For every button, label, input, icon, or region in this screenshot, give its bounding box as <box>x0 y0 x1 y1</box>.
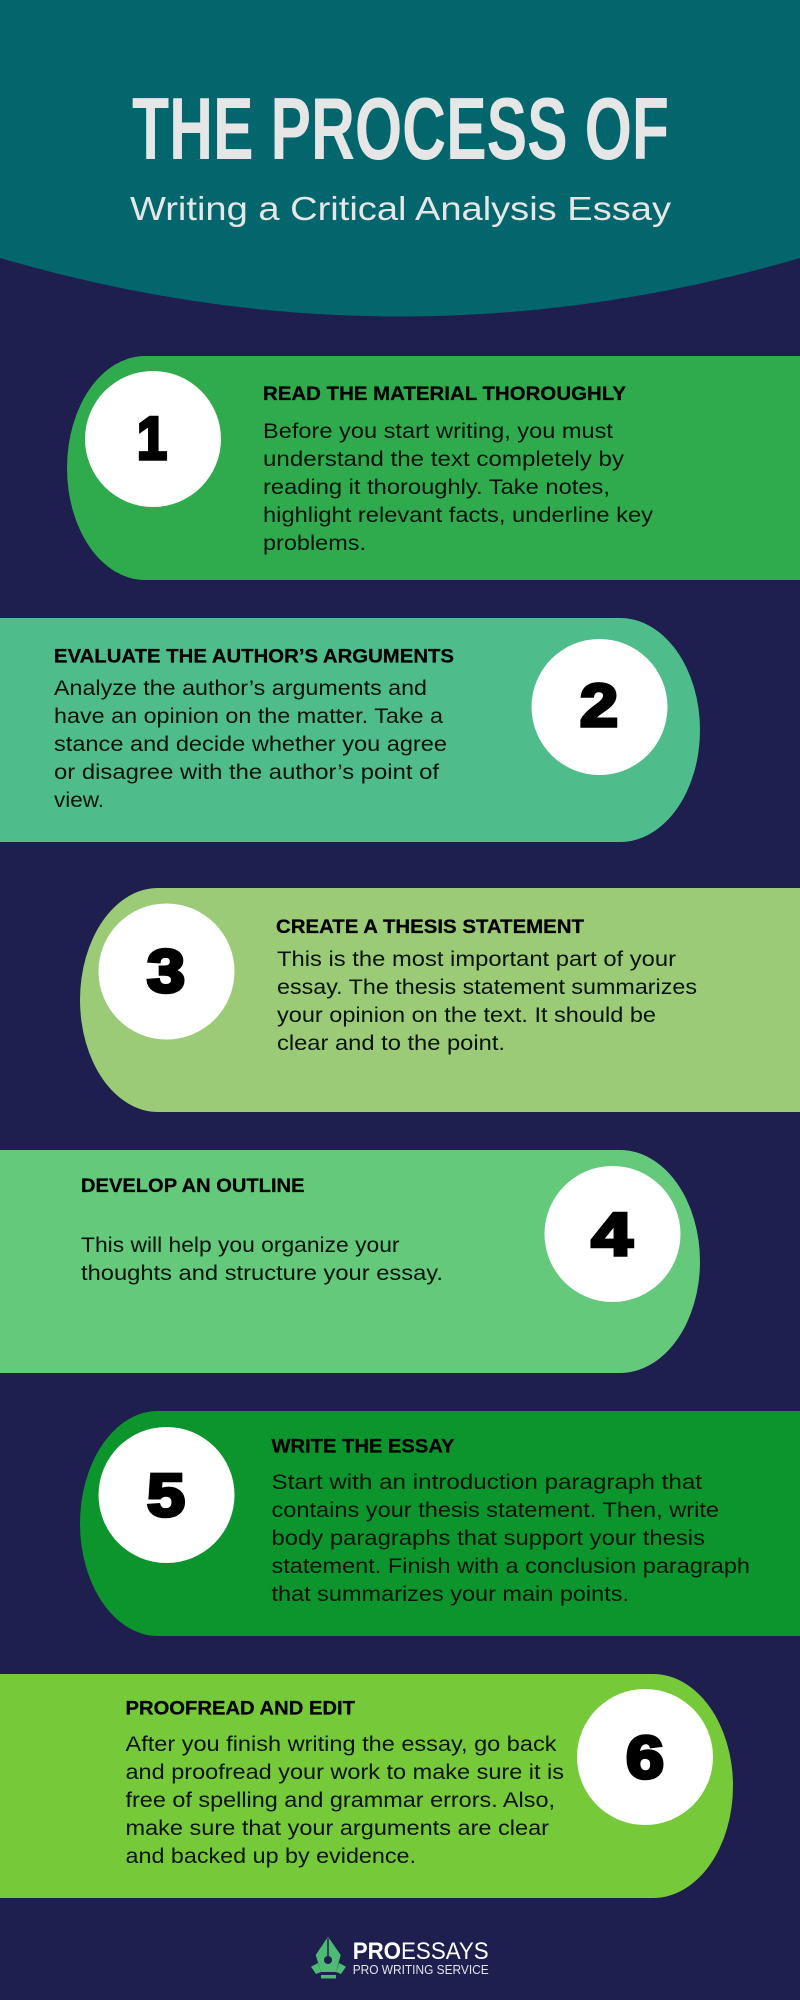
text: step 3 body: This is the most important part of your <box>277 948 676 971</box>
text: step 1 body: problems. <box>263 532 366 555</box>
logo: ProEssays <box>311 1937 489 1978</box>
text: step 1 body: understand the text completely by <box>263 448 625 471</box>
text: step 4 body <box>81 1234 443 1285</box>
panel: step 4 develop outline <box>0 1150 700 1373</box>
text: step 3 body: your opinion on the text. It should be <box>277 1004 656 1027</box>
panel: step 6 proofread and edit <box>0 1674 733 1898</box>
icon: pen nib <box>311 1937 346 1978</box>
panel: step 1 read the material <box>67 356 800 580</box>
number 5: 5 <box>147 1462 185 1529</box>
text: step 6 body: and backed up by evidence. <box>126 1845 416 1868</box>
header banner <box>0 0 800 316</box>
text: step 3 body: clear and to the point. <box>277 1032 505 1055</box>
heading: step 3: CREATE A THESIS STATEMENT <box>276 916 584 938</box>
text: step 4 body: This will help you organize your <box>81 1234 400 1257</box>
text: step 2 body: or disagree with the author’s point of <box>54 761 439 784</box>
number 6: 6 <box>626 1724 664 1791</box>
text: step 5 body: statement. Finish with a conclusion paragraph <box>272 1555 750 1578</box>
text: step 6 body: make sure that your arguments are clear <box>126 1817 549 1840</box>
text: step 2 body: have an opinion on the matter. Take a <box>54 705 443 728</box>
text: step 1 body: reading it thoroughly. Take notes, <box>263 476 610 499</box>
text: step 5 body: contains your thesis statement. Then, write <box>272 1499 719 1522</box>
text: step 6 body <box>126 1733 564 1868</box>
heading: step 6: PROOFREAD AND EDIT <box>126 1698 355 1720</box>
text: step 6 body: and proofread your work to make sure it is <box>126 1761 564 1784</box>
text: step 1 body <box>263 420 654 555</box>
text: step 6 body: After you finish writing the essay, go back <box>126 1733 557 1756</box>
text: step 5 body <box>272 1471 750 1606</box>
text: step 1 body: Before you start writing, you must <box>263 420 613 443</box>
title <box>130 79 672 227</box>
title: Writing a Critical Analysis Essay <box>130 190 672 227</box>
heading: step 5: WRITE THE ESSAY <box>272 1436 454 1458</box>
text: step 2 body: view. <box>54 789 104 812</box>
text: step 2 body: Analyze the author’s arguments and <box>54 677 427 700</box>
panel: step 2 evaluate arguments <box>0 618 700 842</box>
number 1: 1 <box>137 405 167 472</box>
panel: step 3 thesis statement <box>80 888 800 1112</box>
number 2: 2 <box>580 672 618 739</box>
text: step 4 body: thoughts and structure your essay. <box>81 1262 443 1285</box>
text: step 3 body: essay. The thesis statement summarizes <box>277 976 697 999</box>
text: step 2 body <box>54 677 447 812</box>
number 3: 3 <box>147 938 185 1005</box>
heading: step 4: DEVELOP AN OUTLINE <box>81 1175 304 1197</box>
text: step 5 body: that summarizes your main points. <box>272 1583 629 1606</box>
logo wordmark: PROESSAYS <box>353 1938 489 1965</box>
text: step 2 body: stance and decide whether you agree <box>54 733 447 756</box>
heading: step 2: EVALUATE THE AUTHOR’S ARGUMENTS <box>54 646 454 668</box>
panel: step 5 write the essay <box>80 1411 800 1636</box>
text: step 5 body: Start with an introduction paragraph that <box>272 1471 702 1494</box>
number 4: 4 <box>592 1201 633 1268</box>
text: step 3 body <box>277 948 697 1055</box>
text: step 6 body: free of spelling and grammar errors. Also, <box>126 1789 555 1812</box>
heading: step 1: READ THE MATERIAL THOROUGHLY <box>263 383 626 405</box>
logo tagline: PRO WRITING SERVICE <box>353 1962 489 1977</box>
text: step 1 body: highlight relevant facts, underline key <box>263 504 654 527</box>
text: step 5 body: body paragraphs that support your thesis <box>272 1527 705 1550</box>
